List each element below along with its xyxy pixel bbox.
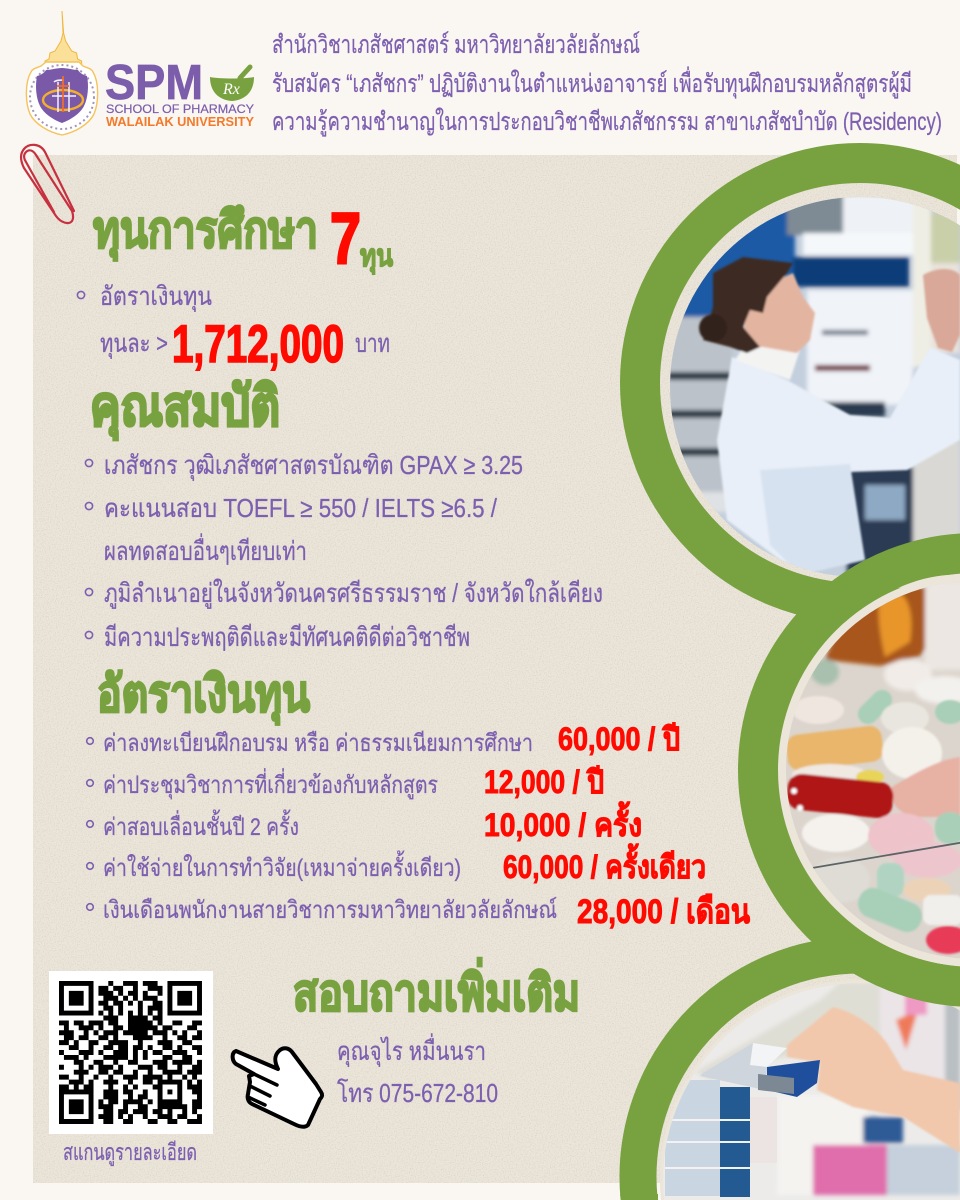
text block: contact details: คุณจุไร หมื่นนรา bbox=[337, 1033, 486, 1067]
heading: qualifications: คุณสมบัติ bbox=[90, 375, 280, 441]
text block: scholarship amount: 1,712,000 bbox=[172, 315, 344, 374]
ring and photo: pharmacist bbox=[640, 163, 960, 603]
text block: scholarship amount bbox=[77, 281, 390, 374]
icon: paperclip bbox=[21, 145, 74, 223]
logo: School of Pharmacy wordmark: WALAILAK UNIVERSITY bbox=[106, 115, 255, 129]
icon: mortar and pestle: Rx bbox=[222, 81, 240, 98]
header text: สำนักวิชาเภสัชศาสตร์ มหาวิทยาลัยวลัยลักษณ์ bbox=[272, 31, 640, 59]
logo: School of Pharmacy wordmark bbox=[105, 56, 255, 129]
header text bbox=[272, 31, 942, 137]
heading: funding rates: อัตราเงินทุน bbox=[97, 666, 310, 725]
QR code bbox=[49, 971, 213, 1134]
heading: scholarship count: 7 bbox=[330, 199, 361, 279]
list: funding items: ค่าลงทะเบียนฝึกอบรม หรือ ค่าธรรมเนียมการศึกษา bbox=[103, 730, 533, 757]
list: funding items bbox=[87, 721, 750, 931]
text block: contact details bbox=[337, 1033, 498, 1108]
list: funding items: เงินเดือนพนักงานสายวิชาการมหาวิทยาลัยวลัยลักษณ์ bbox=[103, 896, 557, 924]
list: qualifications: มีความประพฤติดีและมีทัศนคติดีต่อวิชาชีพ bbox=[104, 622, 470, 652]
list: qualifications: คะแนนสอบ TOEFL ≥ 550 / IELTS ≥6.5 / bbox=[104, 493, 498, 523]
list: qualifications: เภสัชกร วุฒิเภสัชศาสตรบัณฑิต GPAX ≥ 3.25 bbox=[104, 450, 523, 481]
icon: mortar and pestle bbox=[210, 67, 254, 101]
ring and photo: pills bbox=[758, 553, 960, 987]
list: qualifications: ภูมิลำเนาอยู่ในจังหวัดนครศรีธรรมราช / จังหวัดใกล้เคียง bbox=[104, 578, 603, 609]
logo: Walailak University seal bbox=[26, 11, 98, 135]
text block: contact details: โทร 075-672-810 bbox=[337, 1078, 498, 1108]
icon: pointing hand bbox=[233, 1048, 322, 1127]
list: funding items: ค่าสอบเลื่อนชั้นปี 2 ครั้ง bbox=[103, 809, 299, 841]
heading: contact: สอบถามเพิ่มเติม bbox=[293, 958, 580, 1021]
text block: scholarship amount: บาท bbox=[355, 328, 390, 358]
list: funding items: ค่าใช้จ่ายในการทำวิจัย(เหมาจ่ายครั้งเดียว) bbox=[103, 850, 461, 882]
list: funding items: ค่าประชุมวิชาการที่เกี่ยวข้องกับหลักสูตร bbox=[103, 768, 438, 800]
heading: scholarship count bbox=[93, 199, 393, 279]
text block: scholarship amount: ทุนละ > bbox=[100, 328, 168, 359]
logo: School of Pharmacy wordmark: SCHOOL OF PHARMACY bbox=[106, 102, 254, 116]
heading: scholarship count: ทุนการศึกษา bbox=[93, 202, 318, 261]
list: funding items: 60,000 / ครั้งเดียว bbox=[503, 843, 706, 885]
list: funding items: 60,000 / ปี bbox=[558, 721, 680, 757]
list: qualifications: ผลทดสอบอื่นๆเทียบเท่า bbox=[104, 533, 307, 566]
ring and photo: medicine shelf bbox=[620, 955, 960, 1200]
logo: School of Pharmacy wordmark: SPM bbox=[105, 56, 203, 110]
text block: scholarship amount: อัตราเงินทุน bbox=[100, 281, 212, 312]
list: funding items: 12,000 / ปี bbox=[484, 764, 604, 800]
list: funding items: 28,000 / เดือน bbox=[577, 893, 750, 931]
QR caption: สแกนดูรายละเอียด bbox=[63, 1139, 197, 1166]
list: qualifications bbox=[85, 450, 603, 652]
list: funding items: 10,000 / ครั้ง bbox=[484, 801, 642, 843]
heading: scholarship count: ทุน bbox=[360, 240, 393, 275]
